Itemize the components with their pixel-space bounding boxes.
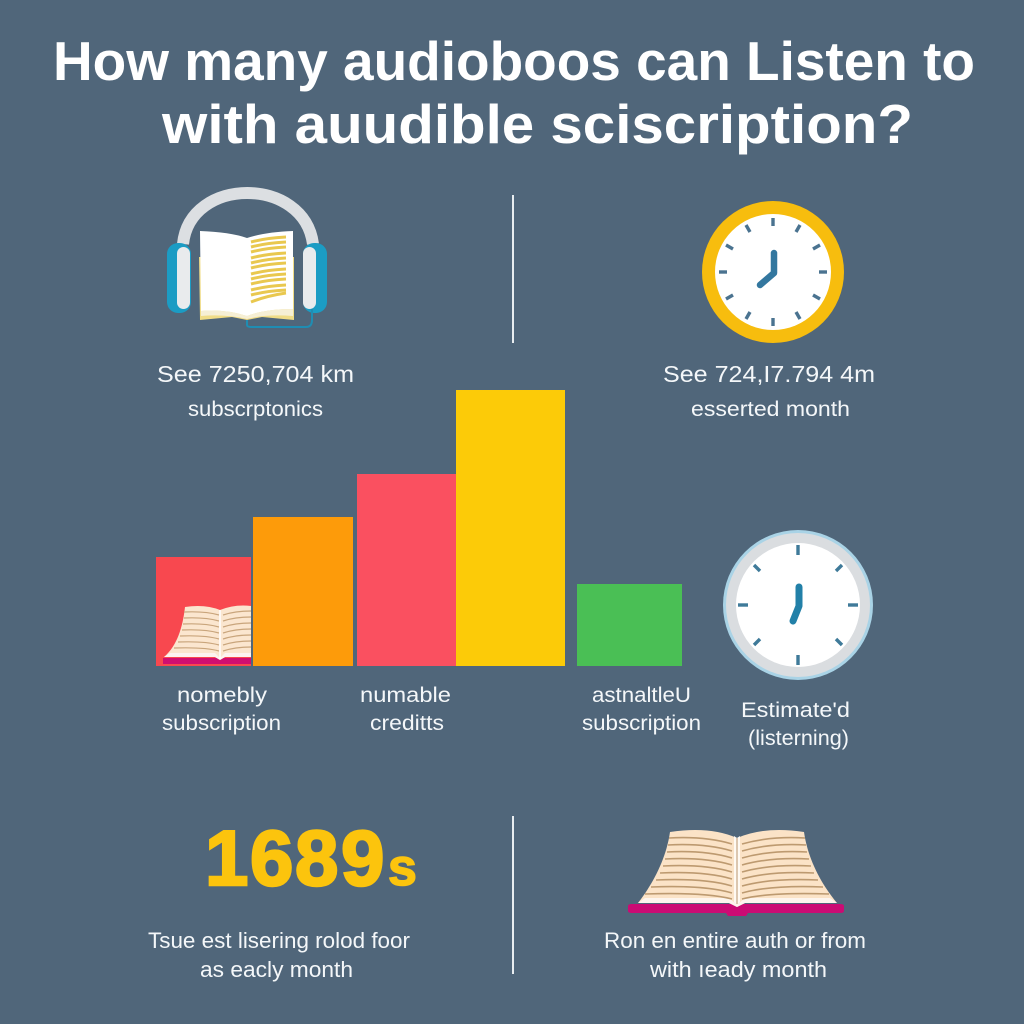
big number: 1689 [205, 814, 384, 902]
text: bar label 1 [162, 684, 281, 735]
icon: large open book [628, 830, 844, 916]
text: top left stat: See 7250,704 km [157, 361, 354, 387]
text: bottom left: as eacly month [200, 957, 353, 982]
text: clock label: Estimate'd [741, 699, 850, 722]
text: top right stat: See 724,I7.794 4m [663, 361, 875, 387]
text: top right stat [663, 361, 875, 421]
text: bar label 3 [582, 684, 701, 735]
icon: yellow clock [702, 201, 844, 343]
text: bar label 2 [360, 684, 451, 735]
bar chart [156, 390, 682, 666]
text: top left stat [157, 361, 354, 421]
text: bar label 3: subscription [582, 712, 701, 735]
title: How many audioboos can Listen to [53, 30, 975, 92]
text: bottom left: Tsue est lisering rolod foor [148, 928, 410, 953]
icon: small book on red bar [163, 606, 251, 664]
title: with auudible sciscription? [161, 93, 913, 155]
title [53, 30, 975, 155]
text: top right stat: esserted month [691, 398, 850, 421]
text: bar label 2: numable [360, 684, 451, 707]
icon: headphones with book [167, 193, 327, 327]
text: top left stat: subscrptonics [188, 398, 323, 421]
text: clock label: (listerning) [748, 727, 849, 750]
text: bottom left [148, 928, 410, 982]
text: bar label 2: creditts [370, 712, 444, 735]
big number: s [388, 839, 417, 897]
text: bottom right [604, 928, 866, 982]
text: bottom right: with ıeady month [649, 957, 827, 982]
text: bottom right: Ron en entire auth or from [604, 928, 866, 953]
icon: white clock [723, 530, 873, 680]
text: bar label 1: nomebly [177, 684, 268, 707]
text: clock label [741, 699, 850, 750]
text: bar label 1: subscription [162, 712, 281, 735]
text: bar label 3: astnaltleU [592, 684, 691, 707]
